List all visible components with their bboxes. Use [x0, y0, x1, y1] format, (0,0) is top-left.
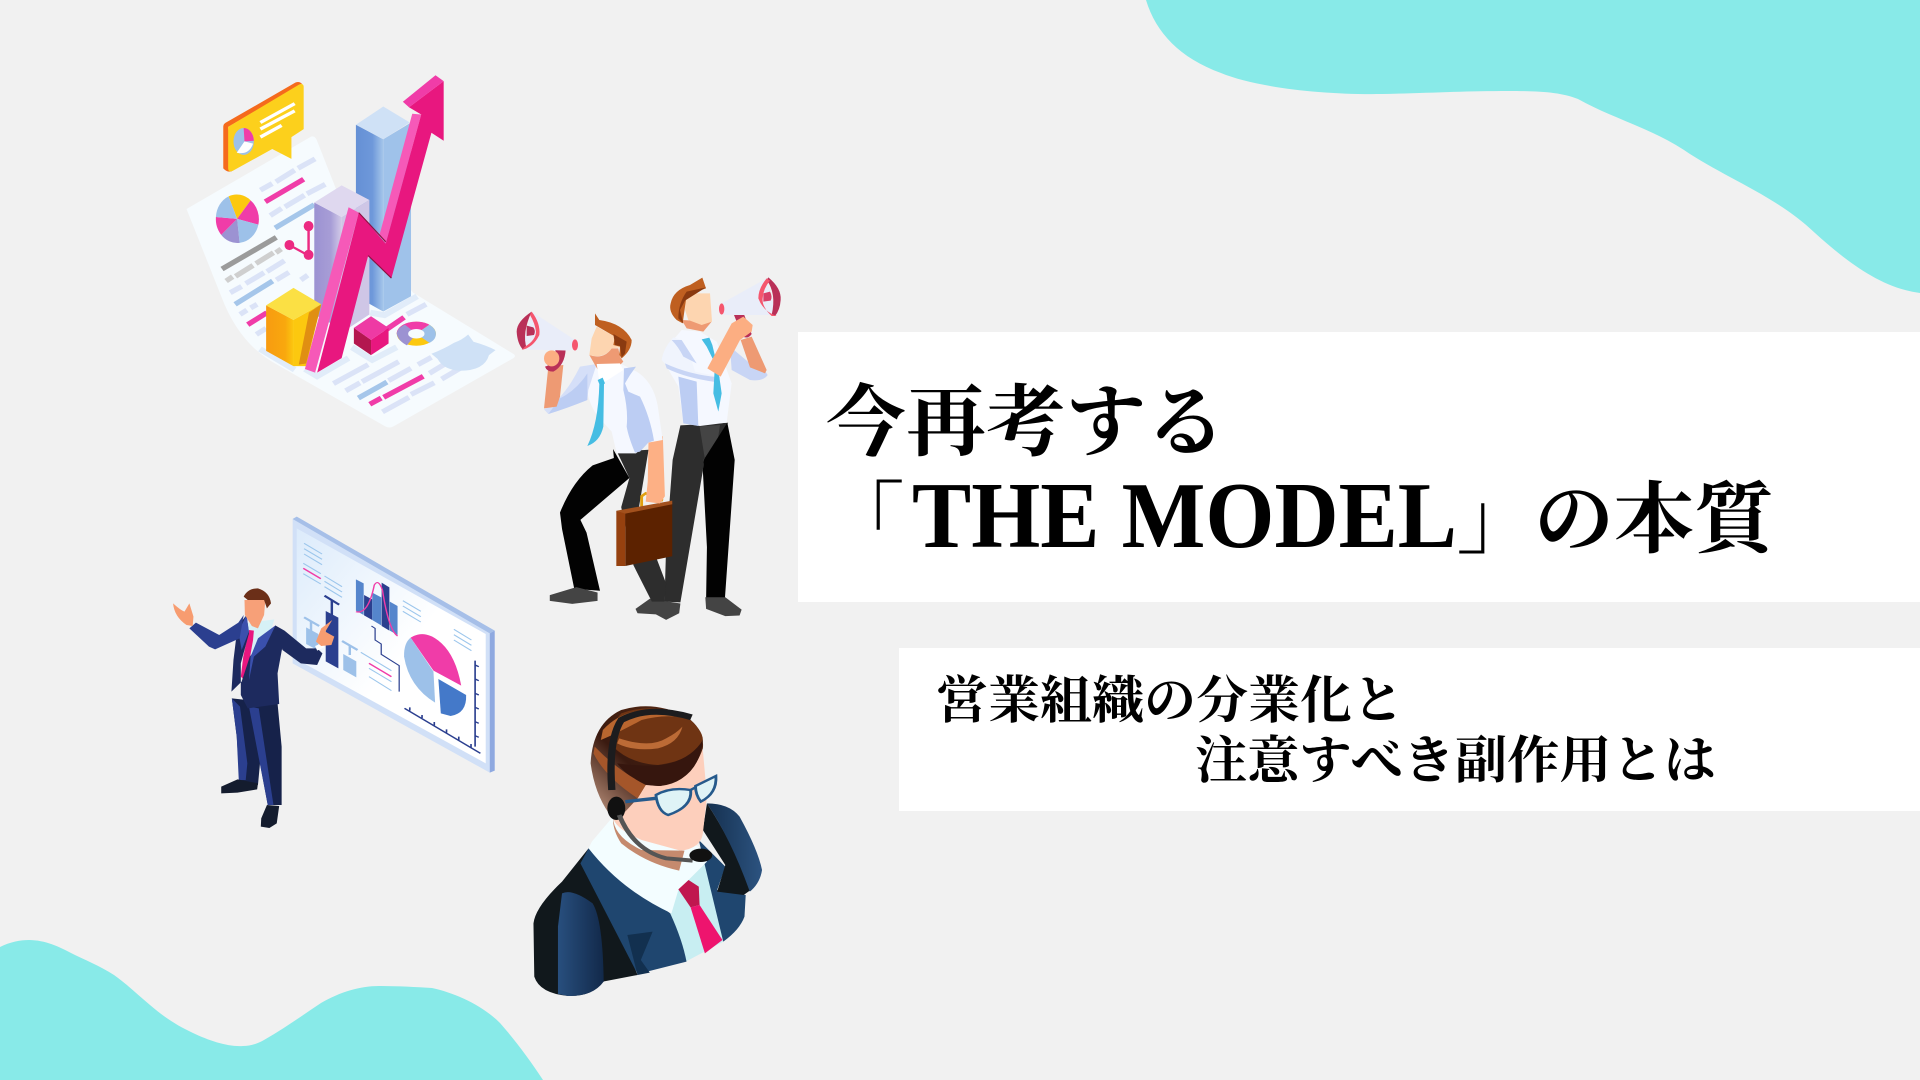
paper sheet — [187, 136, 515, 428]
screen text lines — [303, 543, 471, 691]
right megaphone handle — [734, 314, 752, 338]
subtitle panel — [899, 648, 1920, 811]
title line two: THE MODEL — [912, 464, 1457, 568]
left man sleeve — [544, 364, 597, 414]
illustration: headset operator — [533, 706, 762, 996]
presenter right arm — [276, 626, 322, 665]
operator neck shadow — [613, 817, 684, 871]
decorative blob: bottom left — [0, 940, 543, 1080]
purple bar — [314, 185, 369, 333]
board right edge — [490, 631, 495, 773]
operator shirt — [670, 862, 723, 962]
presenter jacket — [231, 615, 285, 708]
right man front forearm — [707, 317, 753, 377]
left man fist — [544, 350, 559, 366]
operator right lapel — [703, 803, 751, 895]
operator face — [611, 750, 707, 851]
subtitle line two: 注意すべき副作用とは — [1195, 733, 1716, 790]
right man back sleeve — [730, 347, 768, 380]
left megaphone handle — [545, 349, 566, 372]
left man — [517, 312, 663, 453]
right man neck — [682, 320, 712, 332]
presenter shirt — [242, 619, 274, 697]
pink rising arrow — [305, 75, 444, 373]
board frame — [293, 517, 495, 773]
right man legs — [664, 423, 735, 602]
left man dark back leg — [617, 450, 666, 602]
blue bar — [356, 107, 411, 312]
left megaphone — [517, 312, 578, 351]
subtitle line one: 営業組織の分業化と — [936, 673, 1404, 730]
subtitle panel background — [899, 648, 1920, 811]
right man shirt shade — [678, 377, 698, 426]
screen pink lines — [303, 568, 391, 677]
column and curve chart — [356, 579, 398, 636]
right man sleeve fold — [665, 340, 720, 382]
left man collar — [597, 363, 623, 385]
right man torso — [667, 330, 732, 426]
operator collar — [589, 817, 707, 913]
left man hair — [595, 313, 632, 358]
operator glasses — [625, 776, 716, 815]
exploded pie chart — [404, 634, 466, 716]
title panel background — [798, 332, 1920, 602]
presenter shoes — [221, 779, 279, 828]
right man shoes — [636, 597, 742, 620]
left man forearm — [544, 365, 563, 408]
left man tie — [587, 378, 605, 446]
right man — [662, 277, 781, 426]
piggy bank shadow — [431, 334, 496, 371]
title line one: 今再考する — [826, 379, 1226, 466]
operator sleeve — [558, 892, 604, 996]
operator right jacket — [699, 840, 746, 942]
paper pie chart — [216, 194, 259, 243]
left man lower arm — [646, 436, 665, 503]
left man hair shade — [613, 334, 627, 357]
right man hair shade — [678, 287, 706, 323]
illustration: presentation board with charts — [173, 517, 495, 828]
axes — [404, 661, 480, 753]
title line two: の本質 — [1534, 476, 1783, 563]
title line two: 「 — [826, 476, 904, 563]
magenta cube — [354, 316, 389, 355]
operator hair — [591, 706, 703, 813]
left man torso — [587, 363, 663, 453]
left man black front leg — [560, 449, 629, 591]
presenter — [173, 588, 334, 828]
left man neck — [589, 348, 623, 373]
donut chart — [397, 322, 436, 346]
operator lapel shadow — [627, 932, 653, 975]
paper node graph — [284, 221, 313, 260]
briefcase — [616, 493, 672, 566]
step line — [371, 626, 399, 692]
right man tie — [702, 338, 722, 412]
left man shirt shade — [623, 367, 654, 453]
decorative blob: top right — [1146, 0, 1920, 293]
right man front sleeve — [662, 337, 720, 382]
operator left jacket — [580, 848, 687, 974]
presenter left arm — [189, 615, 244, 649]
right man face — [685, 293, 712, 325]
right man hair — [670, 278, 706, 323]
illustration: two men with megaphones, upper bodies — [517, 277, 781, 453]
presenter legs — [232, 698, 282, 805]
illustration: isometric growth chart on paper — [187, 75, 515, 428]
paper text lines — [222, 159, 462, 412]
presenter tie — [241, 630, 254, 682]
right megaphone — [719, 277, 781, 316]
left man sleeve shade — [548, 373, 587, 414]
operator tie — [678, 880, 722, 953]
box plot chart — [304, 596, 358, 677]
title line two: 」 — [1457, 476, 1535, 563]
left man face — [589, 327, 621, 356]
board top edge — [293, 517, 495, 633]
board screen — [297, 528, 486, 763]
left man shoe — [550, 587, 598, 604]
speech bubble with pie — [223, 82, 304, 172]
operator headset — [607, 712, 712, 862]
operator right shoulder — [707, 803, 762, 892]
illustration: two men with megaphones, lower bodies — [550, 423, 742, 620]
title panel — [798, 332, 1920, 602]
yellow bar — [266, 288, 321, 366]
presenter head — [244, 600, 265, 628]
operator left shoulder — [533, 848, 638, 996]
bar shadows — [260, 296, 417, 376]
right man back forearm — [741, 337, 767, 373]
